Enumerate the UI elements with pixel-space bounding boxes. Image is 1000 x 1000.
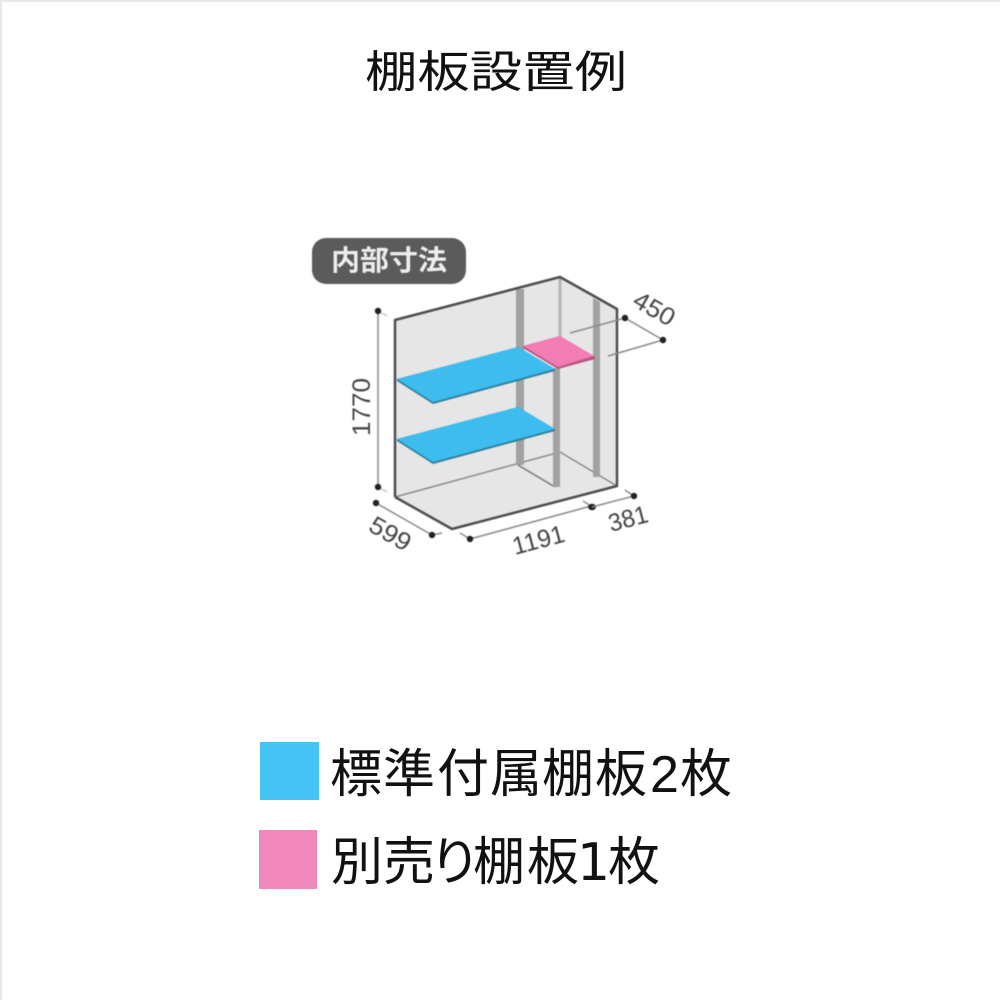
dimension 1191 (460, 501, 596, 561)
shed walls and floor (395, 277, 617, 529)
label: internal dimensions badge: 内部寸法 (331, 245, 447, 276)
legend: standard shelves: 標準付属棚板2枚 (330, 746, 732, 804)
label: internal dimensions badge (312, 238, 466, 284)
dimension 450 (570, 286, 680, 356)
floor brace (518, 465, 555, 487)
dimension 381: 381 (605, 500, 651, 538)
back-left post (516, 289, 524, 465)
dimension 1191: 1191 (509, 520, 568, 561)
shed outline (395, 277, 617, 529)
dimension 1770 (348, 308, 387, 492)
dimension 599: 599 (364, 511, 416, 557)
storage shed diagram (395, 277, 617, 529)
dimension 450: 450 (628, 286, 680, 332)
legend: optional shelf: 別売り棚板1枚 (331, 833, 660, 893)
title: 棚板設置例 (365, 48, 627, 97)
blue shelf lower (397, 407, 555, 464)
right post (593, 298, 600, 477)
centre front post (553, 368, 560, 487)
pink shelf (523, 336, 595, 369)
blue shelf upper (397, 347, 555, 404)
dimension 1770: 1770 (348, 378, 376, 436)
dimension 381 (592, 490, 651, 538)
dimension 599 (364, 500, 442, 557)
